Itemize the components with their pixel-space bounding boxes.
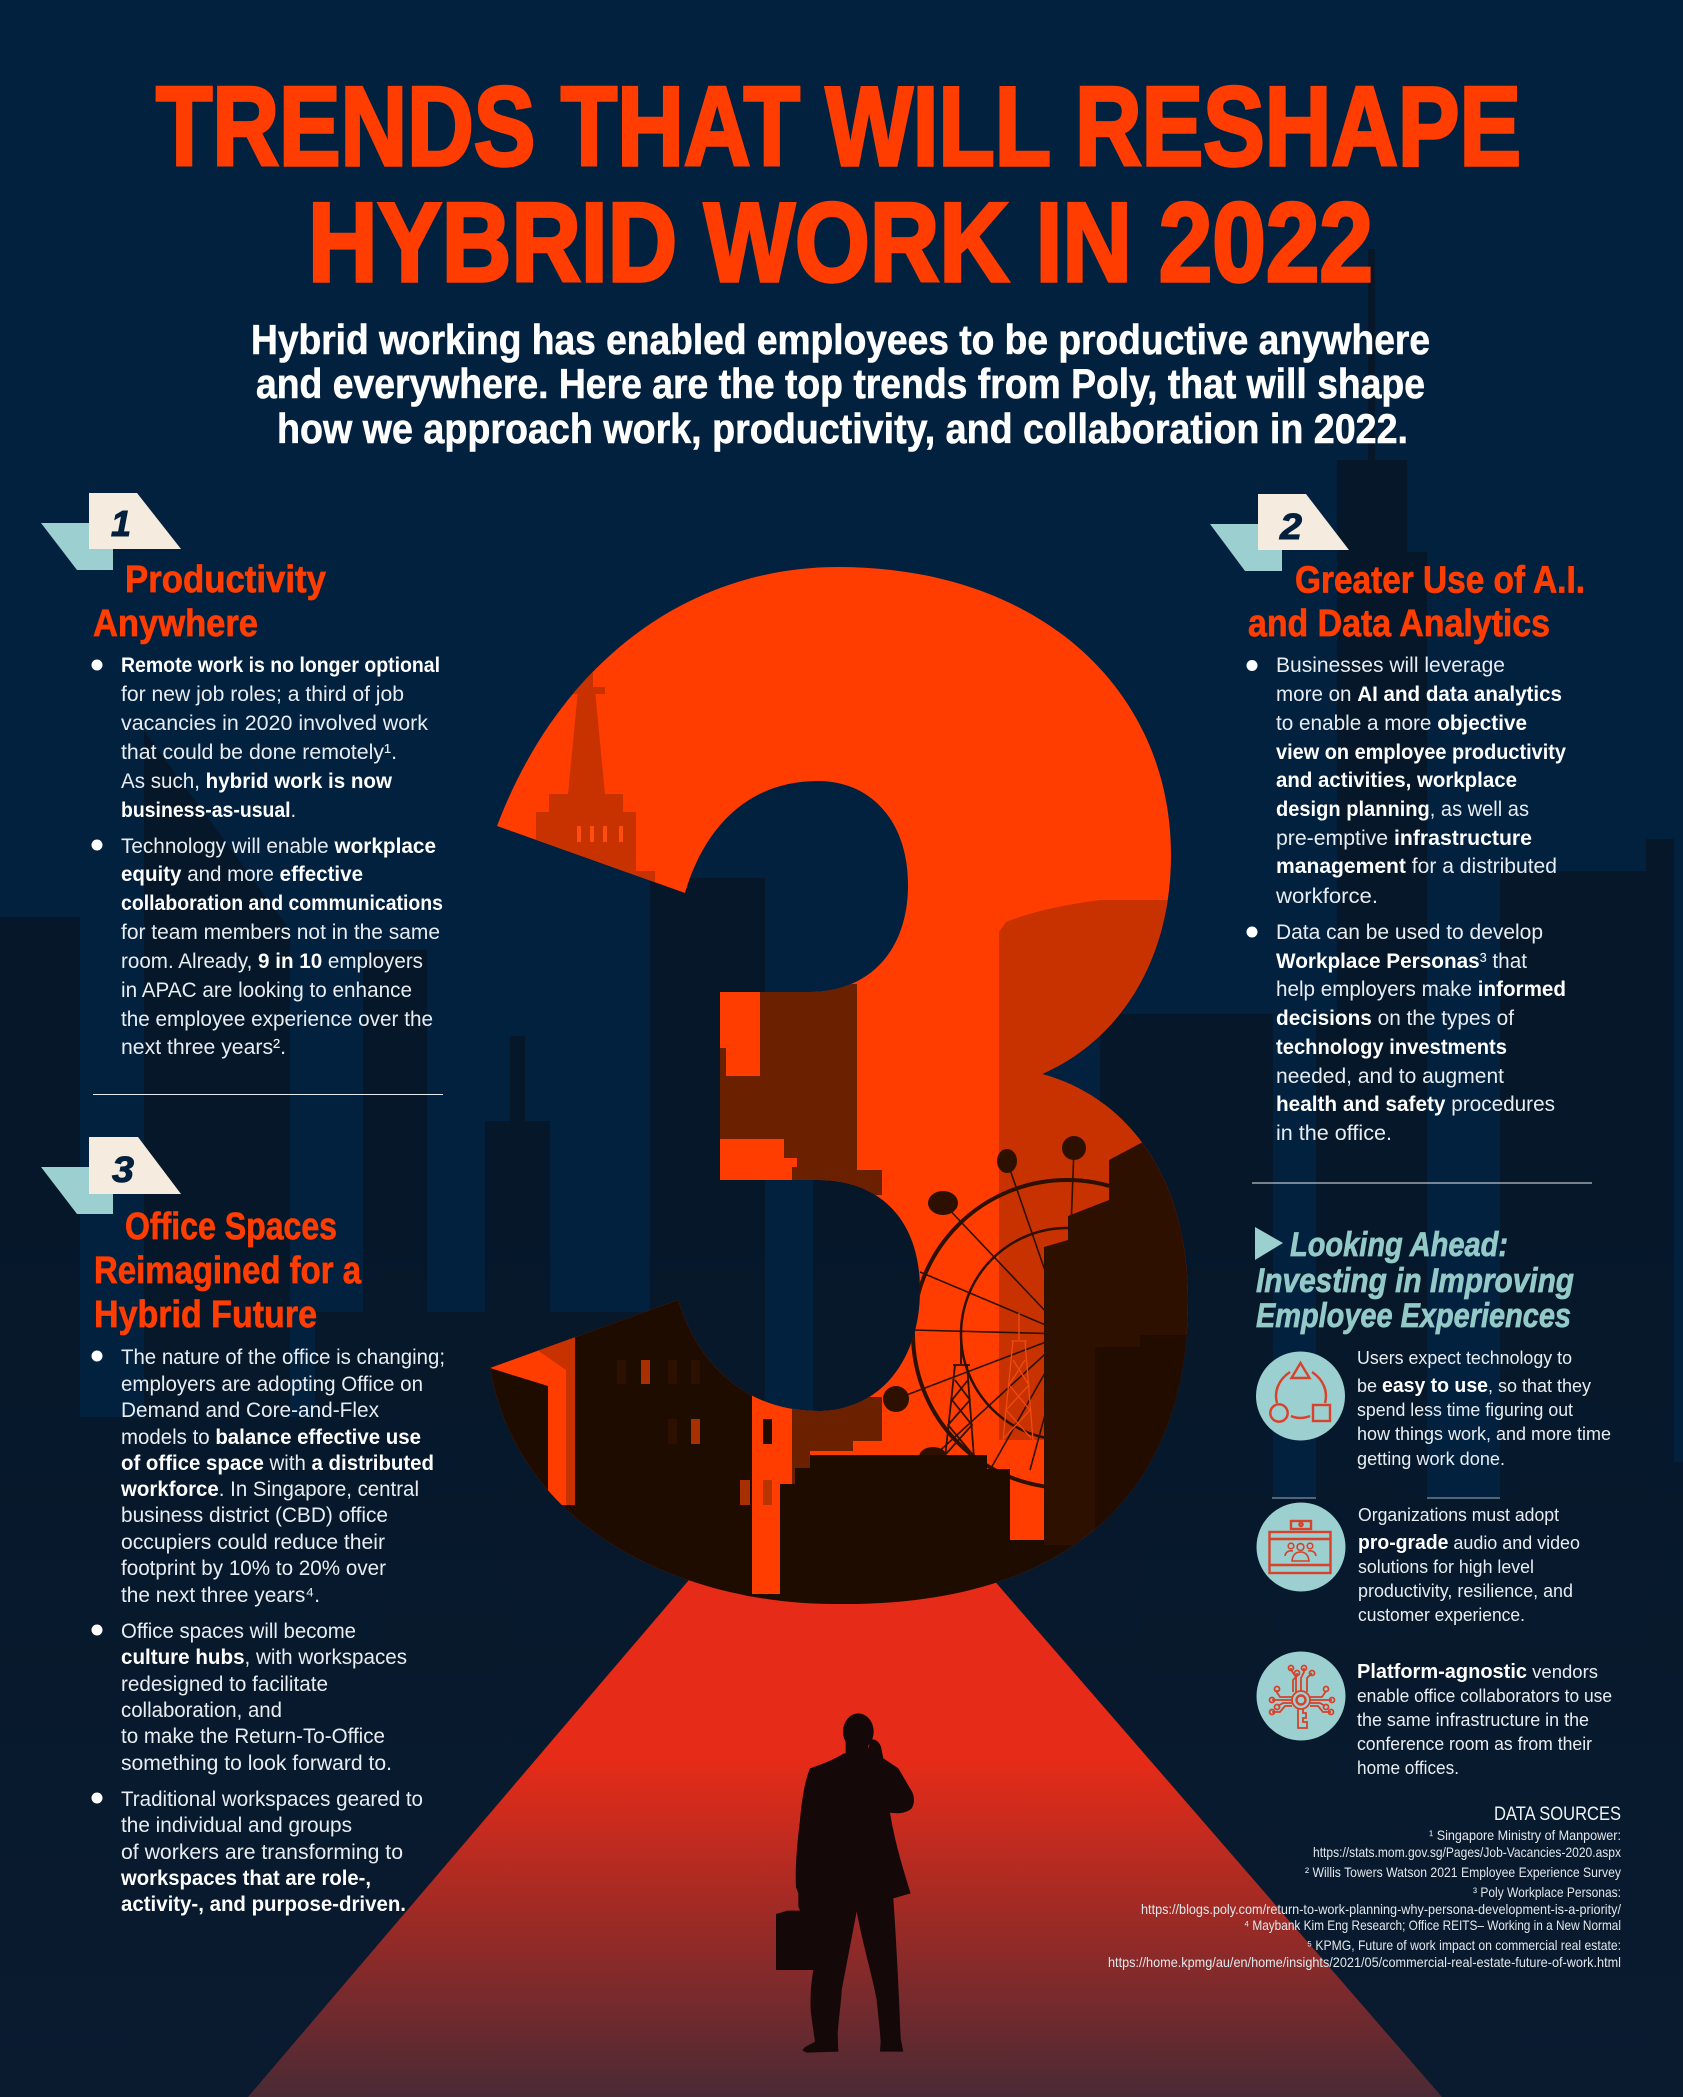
subtitle: Hybrid working has enabled employees to be productive anywhere — [251, 316, 1430, 363]
heading trend 2 — [1248, 560, 1585, 645]
heading trend 3: Office Spaces — [125, 1206, 337, 1248]
heading trend 1 — [93, 559, 326, 645]
bullets trend 3: workforce. In Singapore, central — [120, 1478, 419, 1501]
panel: looking ahead — [1255, 1226, 1612, 1778]
heading trend 1: Productivity — [125, 559, 326, 601]
bullets trend 1: vacancies in 2020 involved work — [121, 711, 428, 735]
badge 2 — [1210, 494, 1349, 571]
data sources: https://blogs.poly.com/return-to-work-planning-why-persona-development-is-a-priority/ — [1141, 1901, 1621, 1917]
bullets trend 1: room. Already, 9 in 10 employers — [121, 949, 423, 973]
bullets trend 3: footprint by 10% to 20% over — [121, 1557, 386, 1580]
bullets trend 3: workspaces that are role-, — [120, 1867, 371, 1890]
bullets trend 3: occupiers could reduce their — [121, 1531, 385, 1554]
text: pro-grade: customer experience. — [1358, 1604, 1525, 1625]
bullets trend 3: Office spaces will become — [121, 1620, 356, 1643]
heading looking ahead: Employee Experiences — [1256, 1297, 1571, 1335]
bullets trend 2: more on AI and data analytics — [1276, 682, 1562, 706]
bullets trend 1: for team members not in the same — [121, 920, 440, 944]
bullets trend 3: culture hubs, with workspaces — [121, 1646, 407, 1669]
building windows — [641, 1360, 772, 1505]
bullets trend 1: business-as-usual. — [121, 798, 296, 822]
heading trend 3: Hybrid Future — [94, 1294, 317, 1336]
bullets trend 2: in the office. — [1276, 1121, 1392, 1145]
bullets trend 2: Workplace Personas³ that — [1276, 949, 1527, 973]
bullets trend 1: equity and more effective — [121, 862, 363, 886]
bullets trend 3: activity-, and purpose-driven. — [121, 1893, 406, 1916]
bullets trend 3: of office space with a distributed — [121, 1452, 434, 1475]
mid-brown building — [720, 984, 882, 1485]
bullets trend 2: health and safety procedures — [1276, 1092, 1555, 1116]
bullets trend 2: view on employee productivity — [1276, 740, 1566, 764]
badge 3: 3 — [112, 1149, 134, 1190]
bullets trend 1: Remote work is no longer optional — [121, 653, 440, 677]
bullets trend 3: collaboration, and — [121, 1699, 282, 1722]
text: easy to use: spend less time figuring out — [1357, 1399, 1573, 1420]
subtitle: and everywhere. Here are the top trends from Poly, that will shape — [256, 360, 1425, 407]
data sources: https://stats.mom.gov.sg/Pages/Job-Vacancies-2020.aspx — [1313, 1844, 1621, 1860]
text: platform-agnostic: Platform-agnostic vendors — [1357, 1661, 1598, 1683]
bullets trend 3: the next three years⁴. — [121, 1584, 320, 1607]
panel: trend 3 office spaces reimagined — [41, 1137, 445, 1916]
text: pro-grade: solutions for high level — [1358, 1556, 1534, 1577]
bullets trend 3: something to look forward to. — [121, 1752, 392, 1775]
badge 3 — [41, 1137, 181, 1214]
data sources: ³ Poly Workplace Personas: — [1473, 1884, 1621, 1900]
bullets trend 1: in APAC are looking to enhance — [121, 978, 412, 1002]
text: platform-agnostic: conference room as from their — [1357, 1733, 1592, 1754]
bullets trend 3: The nature of the office is changing; — [121, 1346, 445, 1369]
bullets trend 2 — [1246, 653, 1566, 1145]
bullets trend 2: Data can be used to develop — [1276, 920, 1543, 944]
bullets trend 2: and activities, workplace — [1276, 768, 1517, 792]
bullets trend 2: to enable a more objective — [1276, 711, 1527, 735]
bullets trend 2: technology investments — [1276, 1035, 1507, 1059]
bullets trend 2: decisions on the types of — [1276, 1006, 1514, 1030]
ferris wheel — [908, 1160, 1182, 1488]
heading trend 2: and Data Analytics — [1248, 603, 1550, 645]
title: HYBRID WORK IN 2022 — [308, 180, 1373, 305]
bullets trend 2: help employers make informed — [1276, 977, 1566, 1001]
bullets trend 3 — [92, 1346, 445, 1916]
heading trend 3: Reimagined for a — [94, 1250, 362, 1292]
heading looking ahead: Investing in Improving — [1256, 1262, 1574, 1300]
text: easy to use — [1357, 1347, 1611, 1469]
panel: trend 2 AI and data analytics — [1210, 494, 1585, 1145]
text: pro-grade: pro-grade audio and video — [1358, 1532, 1580, 1554]
text: platform-agnostic: the same infrastructure in the — [1357, 1709, 1589, 1730]
badge 1 — [41, 493, 181, 570]
text: pro-grade: Organizations must adopt — [1358, 1504, 1559, 1525]
data sources — [1108, 1804, 1621, 1970]
bullets trend 3: business district (CBD) office — [121, 1504, 388, 1527]
bullets trend 2: needed, and to augment — [1276, 1064, 1504, 1088]
skyline tower — [536, 672, 655, 882]
data sources: https://home.kpmg/au/en/home/insights/2021/05/commercial-real-estate-future-of-work.html — [1108, 1954, 1621, 1970]
badge 1: 1 — [111, 503, 131, 544]
text: platform-agnostic — [1357, 1661, 1612, 1778]
bullets trend 3: Demand and Core-and-Flex — [121, 1399, 379, 1422]
bullets trend 2: pre-emptive infrastructure — [1276, 826, 1532, 850]
rear building right — [999, 900, 1175, 1440]
heading looking ahead: Looking Ahead: — [1290, 1226, 1508, 1264]
red road — [248, 1540, 1442, 2097]
text: easy to use: getting work done. — [1357, 1448, 1505, 1469]
text: easy to use: Users expect technology to — [1357, 1347, 1572, 1368]
bullets trend 1: next three years². — [121, 1035, 286, 1059]
bullets trend 1: Technology will enable workplace — [121, 834, 436, 858]
heading trend 1: Anywhere — [93, 603, 258, 645]
heading trend 3 — [94, 1206, 362, 1336]
bullets trend 1: that could be done remotely¹. — [121, 740, 397, 764]
heading trend 2: Greater Use of A.I. — [1295, 560, 1585, 602]
bullets trend 1: As such, hybrid work is now — [121, 769, 392, 793]
bullets trend 2: design planning, as well as — [1276, 797, 1529, 821]
bullets trend 1: for new job roles; a third of job — [121, 682, 404, 706]
badge 2: 2 — [1279, 506, 1302, 547]
text: platform-agnostic: home offices. — [1357, 1757, 1459, 1778]
bullets trend 2: workforce. — [1275, 884, 1378, 908]
subtitle: how we approach work, productivity, and collaboration in 2022. — [277, 405, 1408, 452]
bullets trend 2: Businesses will leverage — [1276, 653, 1505, 677]
bullets trend 1 — [92, 653, 443, 1059]
heading looking ahead — [1255, 1226, 1574, 1335]
big number 3 with city skyline — [480, 560, 1221, 1610]
bullets trend 3: employers are adopting Office on — [121, 1373, 423, 1396]
bullets trend 1: the employee experience over the — [121, 1007, 433, 1031]
bullets trend 3: the individual and groups — [121, 1814, 352, 1837]
data sources: DATA SOURCES — [1494, 1804, 1621, 1825]
text: easy to use: be easy to use, so that they — [1357, 1375, 1592, 1397]
pylon — [945, 1340, 974, 1458]
icon: circuit key — [1256, 1652, 1346, 1740]
subtitle — [251, 316, 1430, 452]
bullets trend 3: models to balance effective use — [121, 1426, 421, 1449]
panel: trend 1 productivity anywhere — [41, 493, 443, 1059]
icon: video conference room — [1256, 1502, 1346, 1592]
text: pro-grade: productivity, resilience, and — [1358, 1580, 1573, 1601]
bullets trend 2: management for a distributed — [1276, 854, 1557, 878]
dark foreground buildings — [490, 1300, 1081, 1604]
data sources: ¹ Singapore Ministry of Manpower: — [1429, 1827, 1621, 1843]
data sources: ² Willis Towers Watson 2021 Employee Experience Survey — [1305, 1864, 1621, 1880]
icon: shapes cycle — [1256, 1352, 1345, 1440]
bullets trend 3: to make the Return-To-Office — [121, 1725, 385, 1748]
data sources: ⁵ KPMG, Future of work impact on commercial real estate: — [1307, 1937, 1621, 1953]
data sources: ⁴ Maybank Kim Eng Research; Office REITS– Working in a New Normal — [1244, 1917, 1621, 1933]
silhouette of businessman with briefcase on phone — [776, 1713, 914, 2053]
bullets trend 1: collaboration and communications — [121, 891, 443, 915]
bullets trend 3: of workers are transforming to — [121, 1841, 403, 1864]
title — [156, 64, 1521, 305]
bullets trend 3: Traditional workspaces geared to — [121, 1788, 423, 1811]
text: platform-agnostic: enable office collaborators to use — [1357, 1685, 1612, 1706]
bullets trend 3: redesigned to facilitate — [121, 1673, 328, 1696]
text: easy to use: how things work, and more time — [1357, 1423, 1611, 1444]
text: pro-grade — [1358, 1504, 1580, 1625]
